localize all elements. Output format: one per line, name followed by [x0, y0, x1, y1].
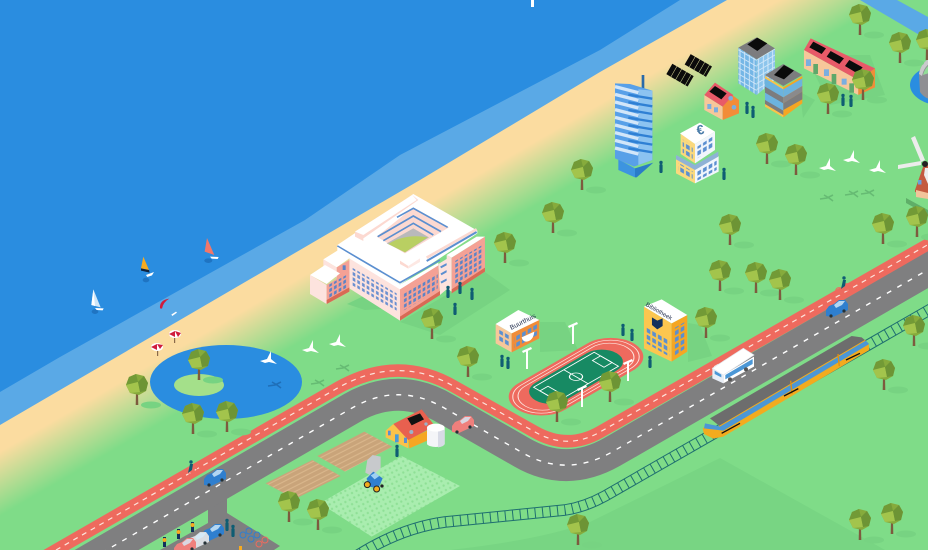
bird shadows: [268, 190, 874, 388]
office tower: [738, 37, 775, 95]
train: [703, 336, 869, 439]
football pitch: [520, 345, 632, 409]
charging poles: [162, 522, 242, 550]
beach umbrellas: [151, 330, 181, 356]
farmhouse and silo: [386, 409, 445, 448]
sea: [0, 0, 680, 392]
tractor with tank: [364, 455, 384, 492]
birds: [260, 150, 886, 364]
railway track: [355, 298, 928, 550]
icon: book: [652, 317, 663, 329]
island: [174, 374, 224, 396]
pond: [150, 345, 302, 419]
building shadows: [347, 55, 885, 362]
right wing: [447, 237, 485, 293]
front faces: [337, 247, 440, 321]
label: bibliotheek: Bibliotheek: [644, 302, 673, 322]
bibliotheek building: [644, 299, 687, 362]
field plots and crops: [266, 432, 460, 537]
shallow water band: [0, 0, 727, 425]
label: buurthuis: Buurthuis: [509, 312, 538, 332]
blue tower: [615, 75, 653, 177]
round tower and pond: [910, 57, 928, 106]
roof: [337, 194, 477, 285]
cycle path: [30, 232, 928, 550]
raised roof blocks: [355, 195, 420, 269]
floodlights: [522, 322, 633, 407]
buurthuis building: [496, 310, 539, 352]
silo: [427, 424, 445, 447]
icon: euro sign: €: [695, 122, 706, 138]
solar roof: [747, 38, 767, 51]
white boat top: [531, 0, 534, 7]
solar roof: [774, 65, 794, 79]
river top right: [860, 0, 928, 40]
cyclists and parked bikes: [183, 276, 850, 547]
sports track: [495, 330, 657, 423]
boats and kite: [91, 238, 219, 316]
bus: [712, 348, 754, 383]
road: [60, 257, 928, 550]
small house: [704, 83, 739, 120]
windmill: [898, 136, 928, 215]
ground solar panels: [669, 59, 709, 81]
left wings: [310, 251, 349, 304]
field: furrows left: [266, 460, 341, 499]
connecting section: [438, 258, 448, 295]
row houses: [804, 38, 875, 95]
parking area: [160, 495, 280, 550]
main building: [310, 194, 485, 321]
field: furrows right: [317, 432, 392, 472]
euro bank building: [676, 122, 719, 183]
stacked apartments: [765, 64, 802, 117]
green hill: [450, 458, 885, 550]
courtyard: [377, 207, 449, 253]
field: crops: [320, 456, 460, 537]
vehicles: cars: [174, 300, 848, 550]
roof stripes: [337, 229, 477, 283]
people: [225, 94, 853, 537]
